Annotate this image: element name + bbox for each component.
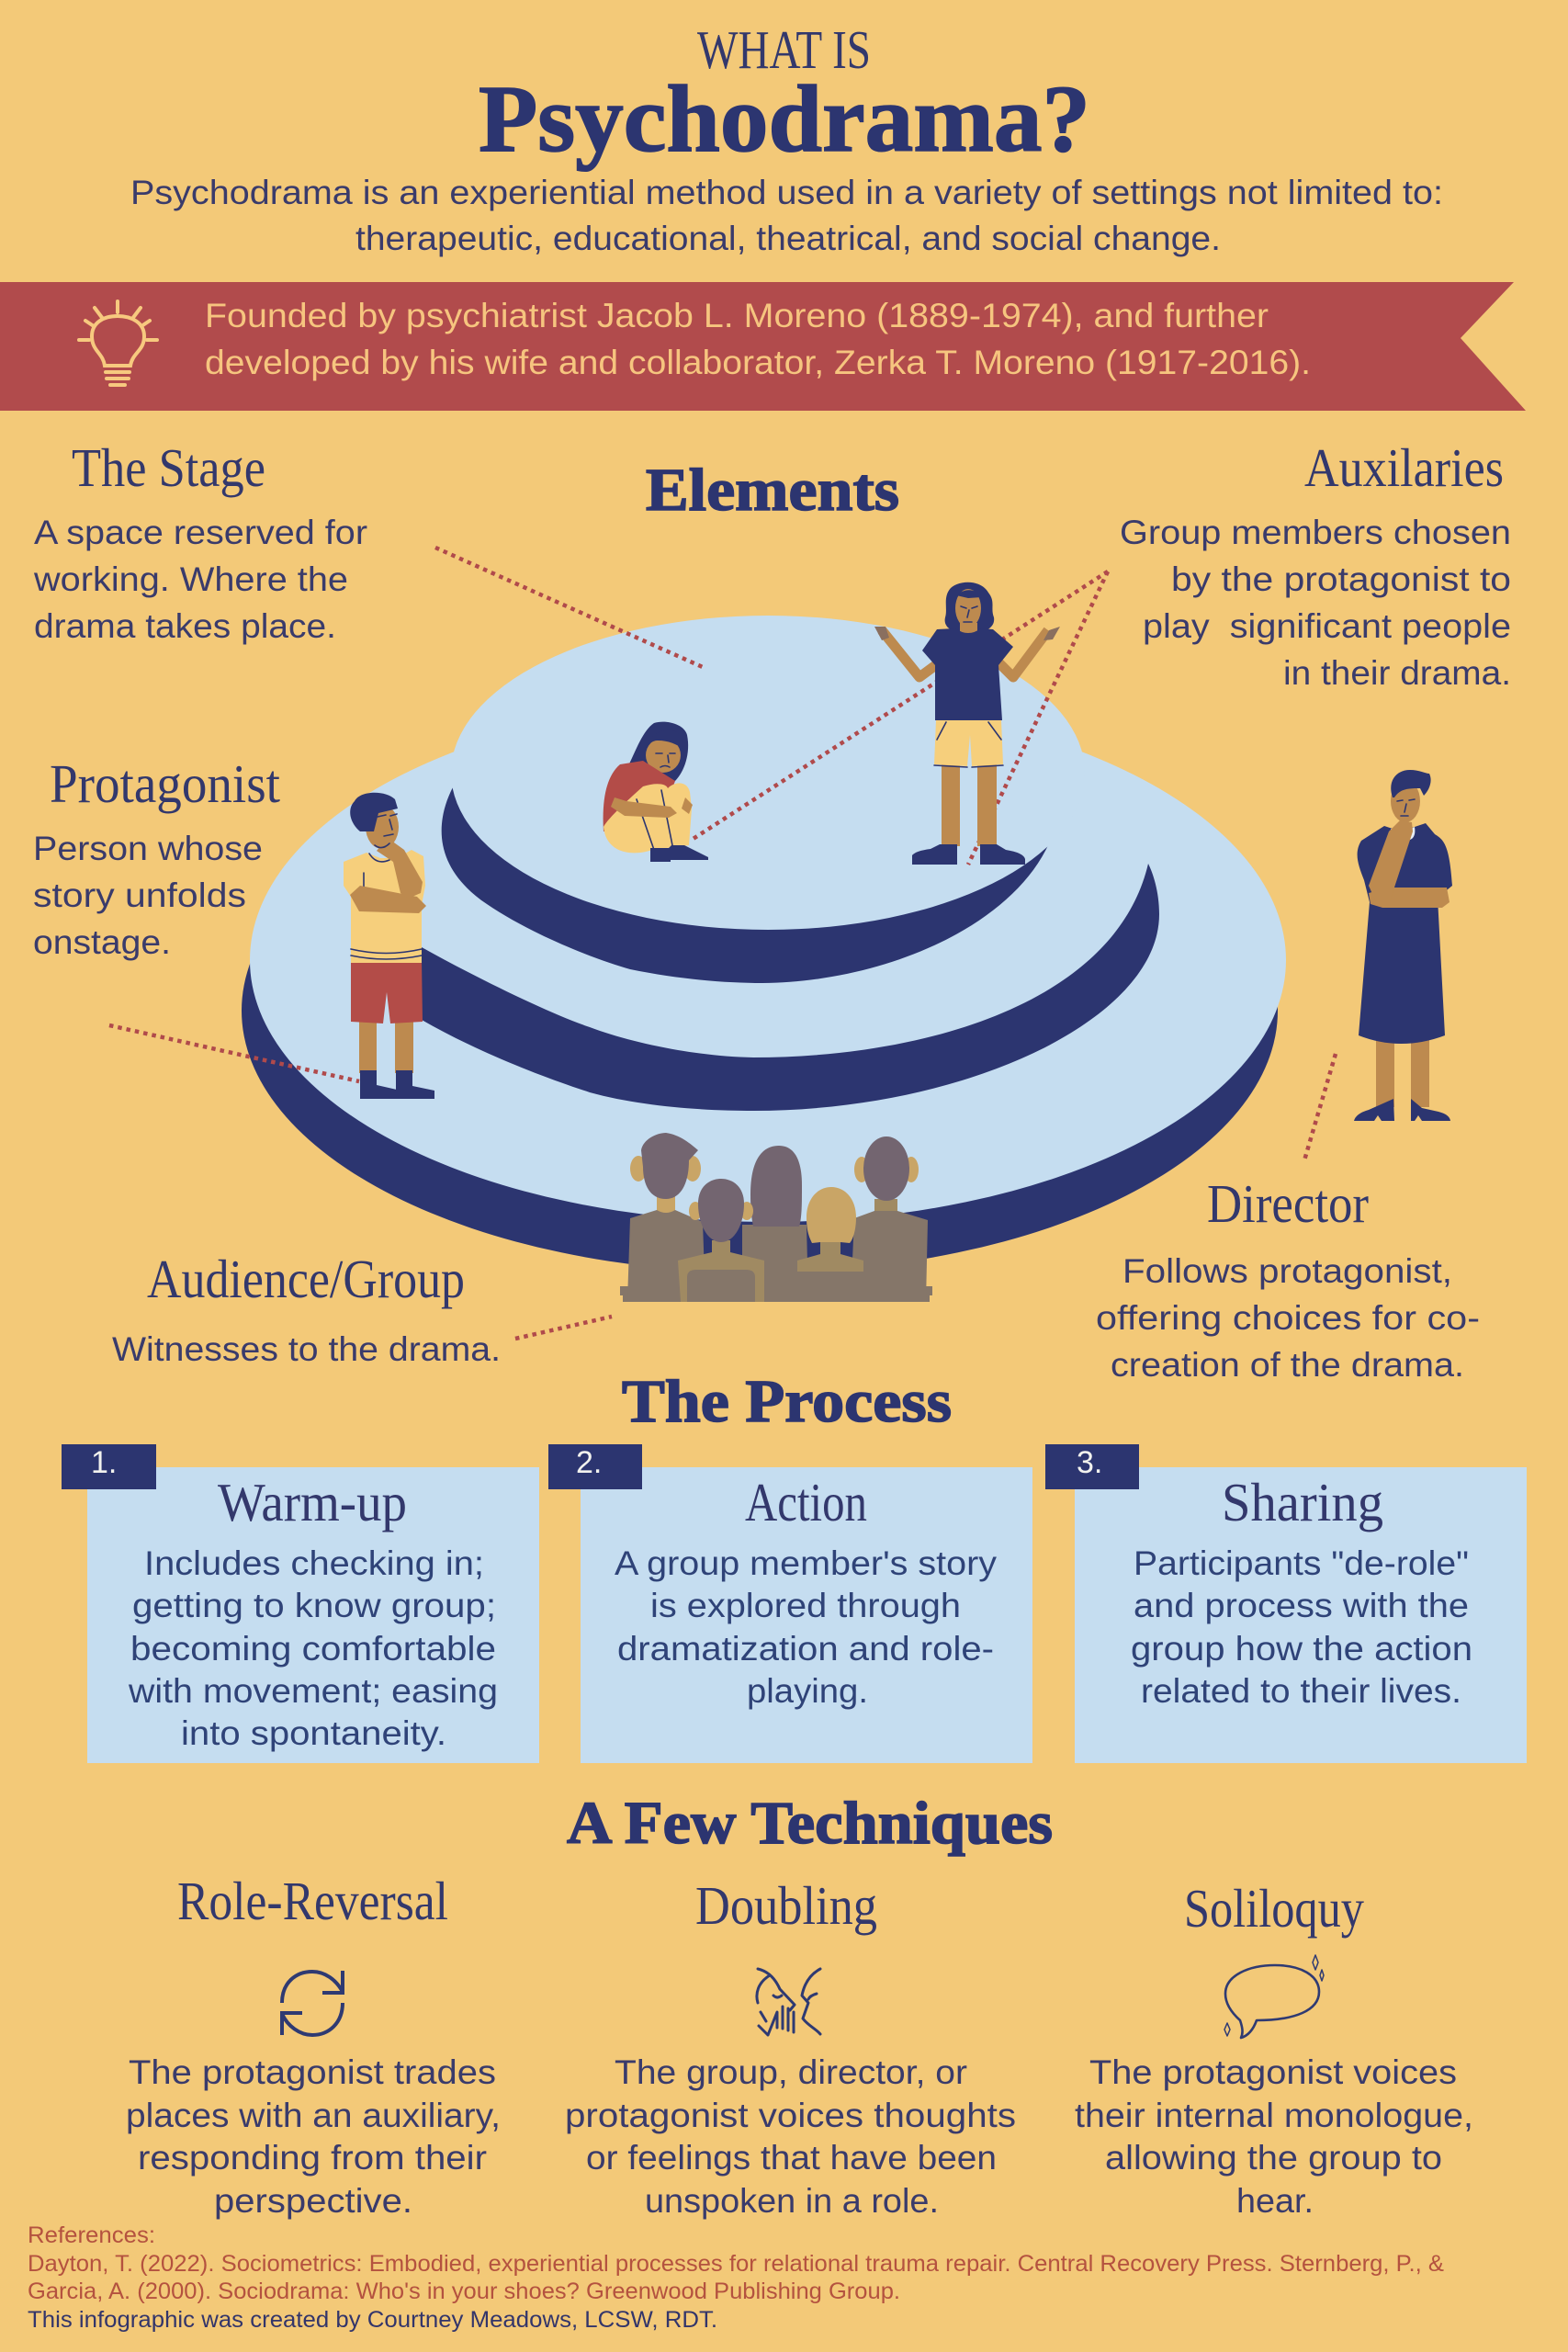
stage illustration <box>242 616 1286 1272</box>
step text: becoming comfortable <box>130 1630 496 1668</box>
technique: doubling <box>565 1875 1016 2220</box>
technique: role-reversal: perspective. <box>214 2182 412 2220</box>
references: This infographic was created by Courtney Meadows, LCSW, RDT. <box>28 2307 717 2333</box>
founder text <box>205 297 1311 381</box>
icon: whisper <box>757 1969 820 2035</box>
panel: warm-up <box>62 1444 539 1763</box>
callout: auxiliaries: by the protagonist to <box>1171 560 1511 598</box>
panel: sharing <box>1045 1444 1527 1763</box>
banner: founders <box>0 282 1526 411</box>
step text: is explored through <box>650 1587 961 1624</box>
figure: audience <box>620 1133 932 1302</box>
technique: soliloquy: The protagonist voices <box>1089 2053 1457 2091</box>
step text: group how the action <box>1131 1630 1472 1668</box>
technique: doubling: or feelings that have been <box>586 2139 997 2177</box>
callout: protagonist <box>33 753 281 961</box>
top tier top <box>451 616 1085 930</box>
callout: protagonist: Protagonist <box>50 753 281 814</box>
step number 3 <box>1045 1444 1139 1489</box>
callout: the stage: drama takes place. <box>34 607 336 645</box>
technique: soliloquy: their internal monologue, <box>1075 2097 1473 2134</box>
callout: auxiliaries: Auxilaries <box>1304 437 1504 498</box>
technique: doubling: The group, director, or <box>615 2053 967 2091</box>
technique: doubling: protagonist voices thoughts <box>565 2097 1016 2134</box>
technique: soliloquy: Soliloquy <box>1184 1878 1364 1939</box>
references: References: <box>28 2222 155 2248</box>
heading: a few techniques: A Few Techniques <box>567 1790 1053 1857</box>
references: Garcia, A. (2000). Sociodrama: Who's in your shoes? Greenwood Publishing Group. <box>28 2278 900 2304</box>
title: psychodrama: Psychodrama? <box>479 66 1090 172</box>
ribbon shape <box>0 282 1526 411</box>
heading: the process: The Process <box>622 1368 952 1435</box>
step text: with movement; easing <box>128 1672 498 1710</box>
callout: auxiliaries: in their drama. <box>1283 654 1511 692</box>
callout: the stage <box>33 437 367 645</box>
callout: the stage: The Stage <box>72 437 265 498</box>
step text: Participants "de-role" <box>1134 1544 1469 1582</box>
step number 2 <box>548 1444 642 1489</box>
callout: auxiliaries: Group members chosen <box>1120 514 1511 551</box>
step number 3: 3. <box>1077 1445 1102 1480</box>
callout: the stage: working. Where the <box>33 560 348 598</box>
callout: director: offering choices for co- <box>1096 1299 1480 1337</box>
front right viewer <box>797 1187 865 1302</box>
bottom tier edge <box>242 749 1278 1272</box>
step text: getting to know group; <box>132 1587 496 1624</box>
heading: elements: Elements <box>646 457 899 524</box>
step text: playing. <box>747 1672 868 1710</box>
step number 1: 1. <box>91 1445 117 1480</box>
step text: Includes checking in; <box>144 1544 484 1582</box>
back right viewer <box>851 1136 928 1302</box>
panel: action <box>548 1444 1032 1763</box>
step title: Warm-up <box>218 1472 407 1532</box>
figure: seated girl <box>604 722 708 862</box>
callout: director <box>1096 1173 1480 1384</box>
technique: soliloquy <box>1075 1878 1473 2220</box>
step title: Sharing <box>1222 1472 1383 1532</box>
references: Dayton, T. (2022). Sociometrics: Embodied, experiential processes for relational trauma repair. Central Recovery Press. Sternberg, P., & <box>28 2251 1444 2277</box>
connector lines <box>109 548 1336 1339</box>
callout: audience <box>112 1249 501 1368</box>
technique: doubling: Doubling <box>695 1875 877 1936</box>
back left viewer <box>627 1133 705 1302</box>
technique: soliloquy: hear. <box>1236 2182 1314 2220</box>
callout: audience: Audience/Group <box>147 1249 465 1309</box>
step text <box>128 1544 498 1752</box>
founder text: developed by his wife and collaborator, Zerka T. Moreno (1917-2016). <box>205 344 1311 381</box>
technique: role-reversal: Role-Reversal <box>177 1871 448 1931</box>
front left viewer <box>678 1179 764 1302</box>
back middle viewer <box>742 1146 808 1302</box>
technique: role-reversal: The protagonist trades <box>129 2053 496 2091</box>
icon: cycle arrows <box>282 1971 343 2035</box>
step title: Action <box>745 1472 867 1532</box>
references <box>28 2222 1444 2333</box>
callout: director: Director <box>1207 1173 1369 1234</box>
technique: doubling: unspoken in a role. <box>645 2182 939 2220</box>
technique: role-reversal <box>126 1871 501 2220</box>
callout: director: Follows protagonist, <box>1122 1252 1452 1290</box>
callout: auxiliaries <box>1120 437 1511 692</box>
icon: speech bubble <box>1224 1955 1324 2038</box>
middle tier edge <box>404 864 1159 1111</box>
step number 1 <box>62 1444 156 1489</box>
callout: audience: Witnesses to the drama. <box>112 1330 501 1368</box>
callout: protagonist: onstage. <box>33 923 171 961</box>
step text: dramatization and role- <box>617 1630 994 1668</box>
top tier edge <box>442 784 1049 983</box>
technique: role-reversal: places with an auxiliary, <box>126 2097 501 2134</box>
callout: protagonist: story unfolds <box>33 876 246 914</box>
callout: auxiliaries: play significant people <box>1143 607 1511 645</box>
callout: protagonist: Person whose <box>33 830 263 867</box>
step text <box>615 1544 998 1710</box>
step text: A group member's story <box>615 1544 998 1582</box>
intro text <box>130 174 1443 257</box>
figure: auxiliary woman <box>874 582 1060 865</box>
step number 2: 2. <box>576 1445 602 1480</box>
callout: the stage: A space reserved for <box>34 514 367 551</box>
kicker: what is: WHAT IS <box>697 19 871 80</box>
intro text: therapeutic, educational, theatrical, and social change. <box>355 220 1221 257</box>
step text: into spontaneity. <box>181 1714 446 1752</box>
figure: protagonist boy <box>344 793 434 1099</box>
intro text: Psychodrama is an experiential method used in a variety of settings not limited to: <box>130 174 1443 211</box>
bottom tier top <box>250 698 1286 1222</box>
technique: soliloquy: allowing the group to <box>1105 2139 1442 2177</box>
founder text: Founded by psychiatrist Jacob L. Moreno (1889-1974), and further <box>205 297 1269 334</box>
step text: related to their lives. <box>1141 1672 1461 1710</box>
icon: light bulb <box>79 301 157 385</box>
step text: and process with the <box>1134 1587 1469 1624</box>
step text <box>1131 1544 1472 1710</box>
callout: director: creation of the drama. <box>1111 1346 1464 1384</box>
figure: director <box>1354 770 1452 1121</box>
technique: role-reversal: responding from their <box>138 2139 487 2177</box>
title block <box>479 19 1090 172</box>
